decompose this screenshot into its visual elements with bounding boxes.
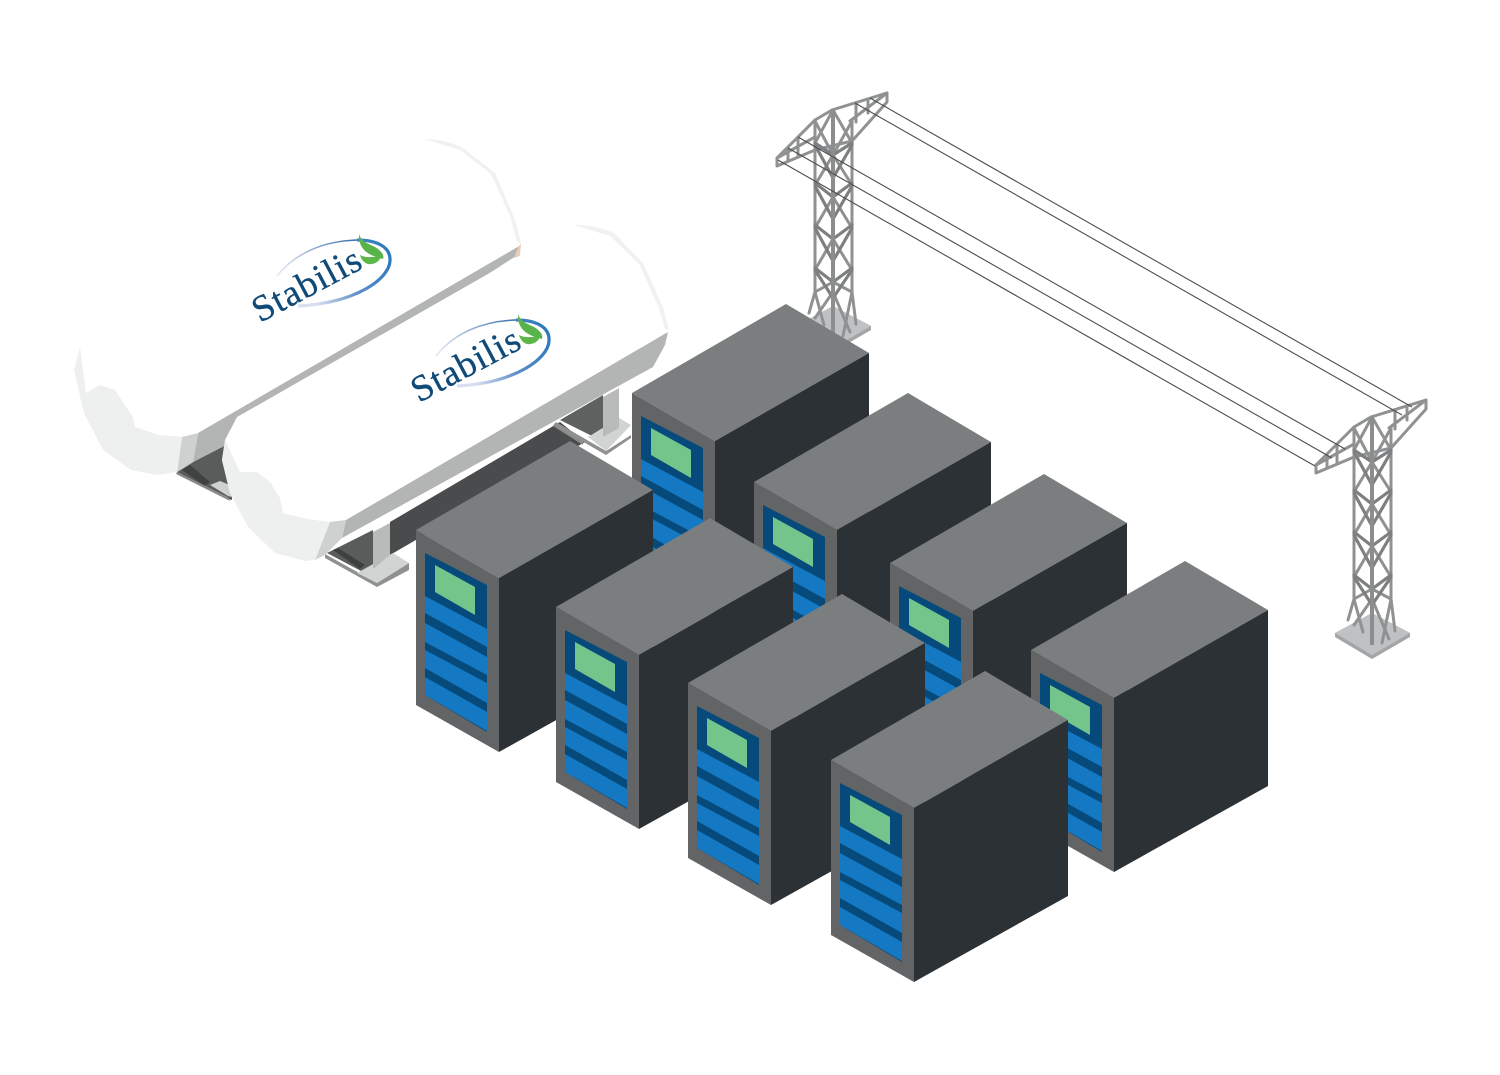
Stabilis logo: front tank [404, 314, 549, 411]
server rack: front row 1 [416, 441, 653, 752]
server rack: back row 3 [890, 474, 1127, 785]
server rack: front row 3 [688, 594, 925, 905]
electrical tower: front right [1316, 400, 1426, 659]
server rack: front row 2 [556, 518, 793, 829]
power lines [778, 98, 1412, 466]
LNG tank: front [222, 225, 669, 561]
server rack: back row 4 [1031, 561, 1268, 872]
right support [554, 388, 631, 455]
tank body [222, 225, 669, 561]
tank supports: front [325, 388, 631, 587]
server rack: front row 4 [831, 671, 1068, 982]
server rack: back row 1 [632, 304, 869, 615]
LNG tank: rear [74, 139, 521, 501]
electrical tower: rear [777, 93, 887, 352]
Stabilis logo: rear tank [245, 234, 390, 331]
server rack: back row 2 [754, 393, 991, 704]
tank body [74, 139, 521, 475]
left support [325, 523, 409, 587]
tank supports [176, 440, 232, 501]
